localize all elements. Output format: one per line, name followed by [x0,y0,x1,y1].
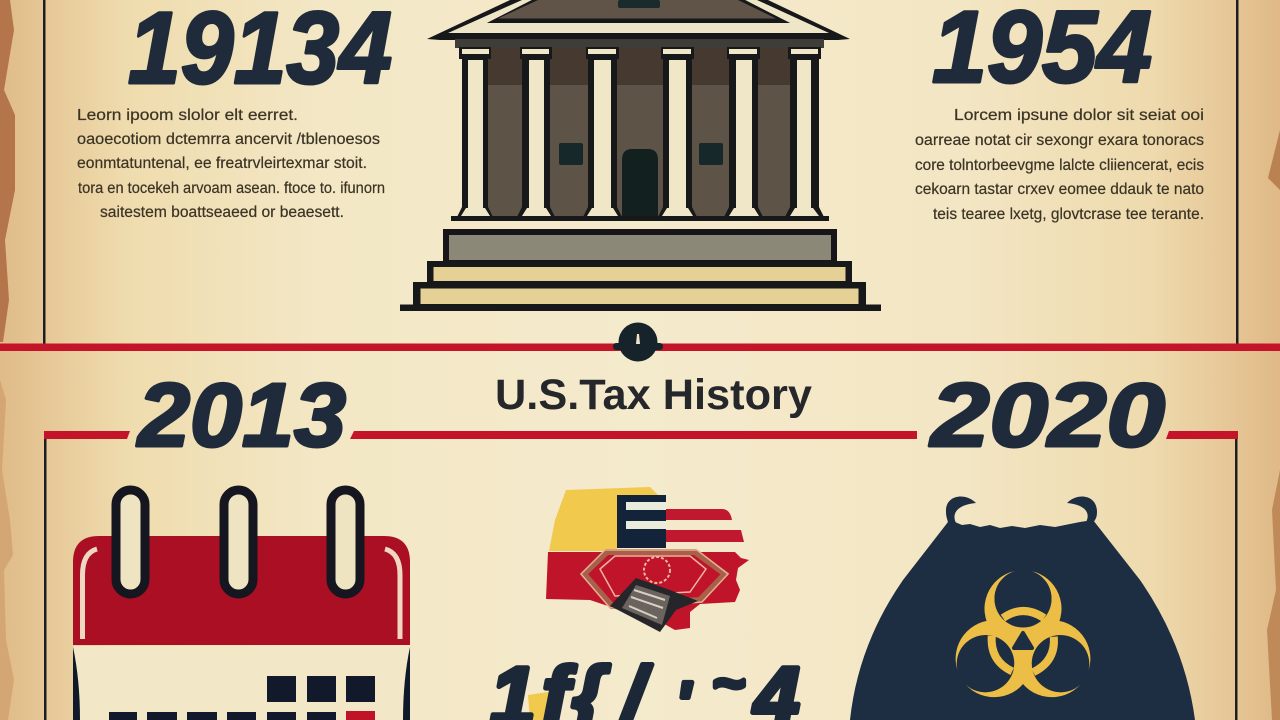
steps [400,229,881,311]
bag ties [946,497,1097,524]
biohazard symbol [942,570,1104,711]
red rules beside years [44,431,1238,439]
icon: torn flag collage [546,487,749,632]
header highlights [82,549,400,639]
garbled brush text: ~ [712,651,745,714]
body text left: tora en tocekeh arvoam asean. ftoce to. ifunorn [78,180,385,197]
body text right: oarreae notat cir sexongr exara tonoracs [915,132,1204,149]
body text left: saitestem boattseaeed or beaesett. [100,204,344,221]
red divider with ornament [0,322,1280,362]
year 2020: 2020 [929,366,1165,466]
body text right: Lorcem ipsune dolor sit seiat ooi [954,107,1204,124]
calendar page [73,646,410,720]
yellow smear [528,692,556,720]
yellow field [549,487,658,551]
wall behind columns [462,48,815,219]
body text left: oaoecotiom dctemrra ancervit /tblenoesos [77,131,380,148]
body text right [915,107,1204,223]
entablature [455,39,824,48]
red stripes [666,509,744,542]
icon: calendar [73,490,410,720]
wallet [610,578,698,632]
roof pediment [427,0,850,40]
body text right: teis tearee lxetg, glovtcrase tee terante. [933,206,1204,223]
body text right: cekoarn tastar crxev eomee ddauk te nato [915,181,1204,198]
bag body [850,520,1195,720]
year 1954 block [915,0,1204,223]
calendar rings [116,490,360,594]
title: U.S.Tax History [495,371,812,419]
seal emblem [581,550,728,608]
navy canton [617,495,666,548]
body text right: core tolntorbeevgme lalcte cliiencerat, ecis [915,157,1204,174]
page edge shadows [73,647,410,720]
body text left: eonmtatuntenal, ee freatrvleirtexmar stoit. [77,155,367,172]
icon: round dial ornament [613,322,663,362]
icon: government building [400,0,881,311]
icon: money bag with biohazard symbol [850,497,1195,720]
year 2013: 2013 [136,366,346,466]
year 1913 block [77,0,392,221]
white canton stripes [626,502,666,529]
calendar header [73,536,410,645]
body text left: Leorn ipoom slolor elt eerret. [77,107,298,124]
body text left [77,107,385,221]
brush lettering [490,651,800,720]
columns [457,47,824,217]
date grid [109,676,375,720]
column base line [451,216,829,221]
red lower field [546,552,749,630]
